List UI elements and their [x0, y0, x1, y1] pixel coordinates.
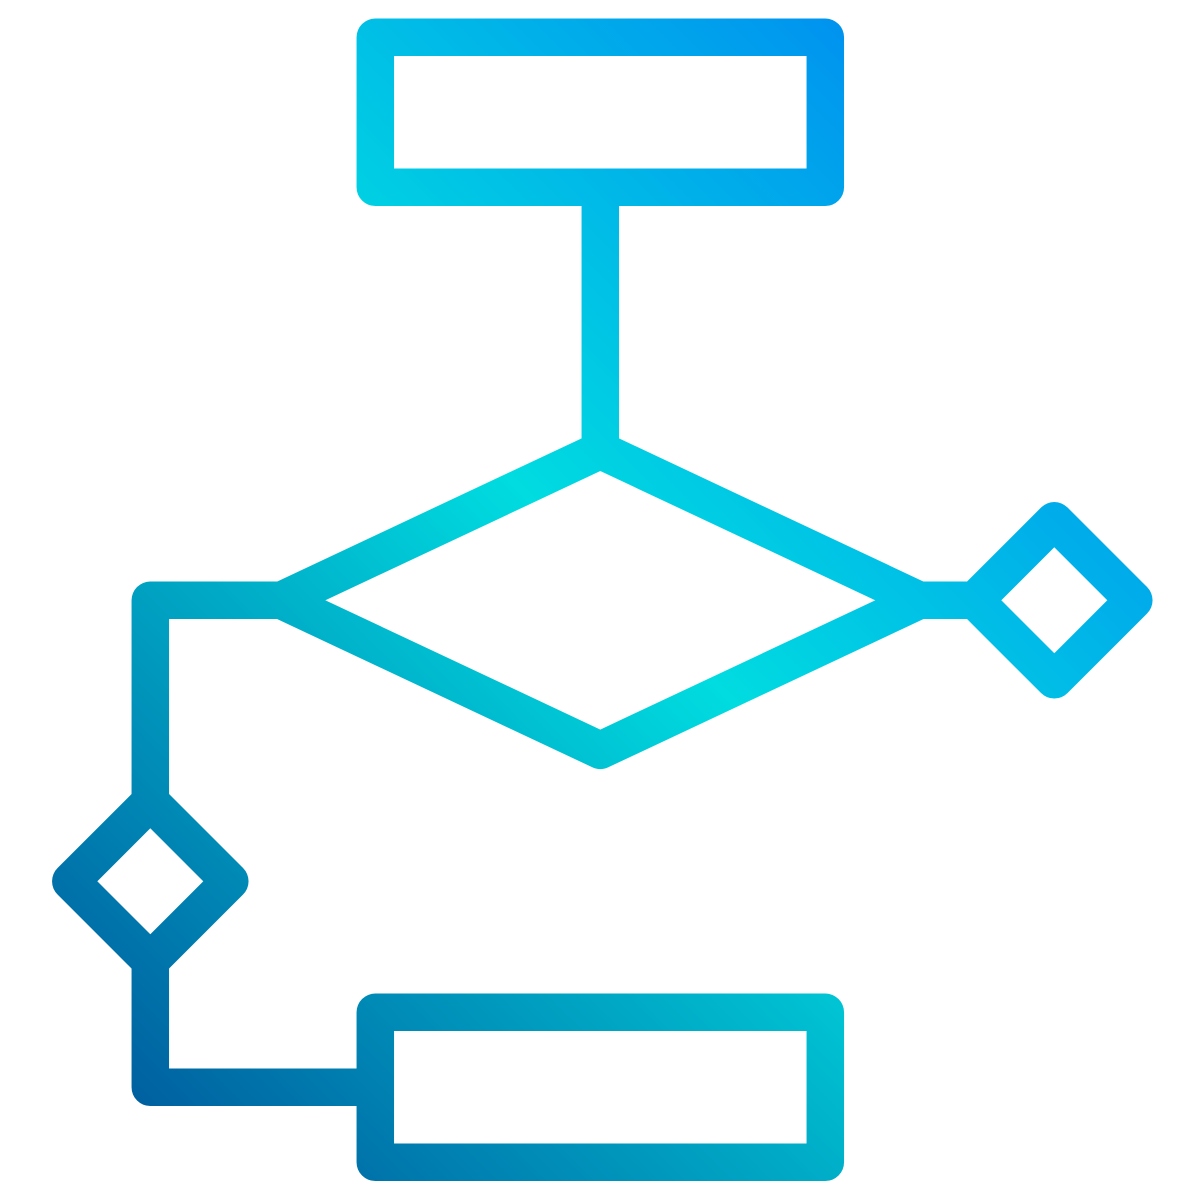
connector: left diamond to bottom box: [150, 960, 375, 1087]
top process box: [375, 37, 825, 187]
connector: central diamond to left diamond: [150, 600, 281, 802]
left small diamond: [71, 802, 230, 961]
connector: central diamond to right diamond: [919, 582, 975, 619]
bottom process box: [375, 1012, 825, 1162]
right small diamond: [975, 521, 1134, 680]
connector: top box to decision diamond: [582, 187, 619, 450]
central decision diamond: [281, 450, 919, 750]
